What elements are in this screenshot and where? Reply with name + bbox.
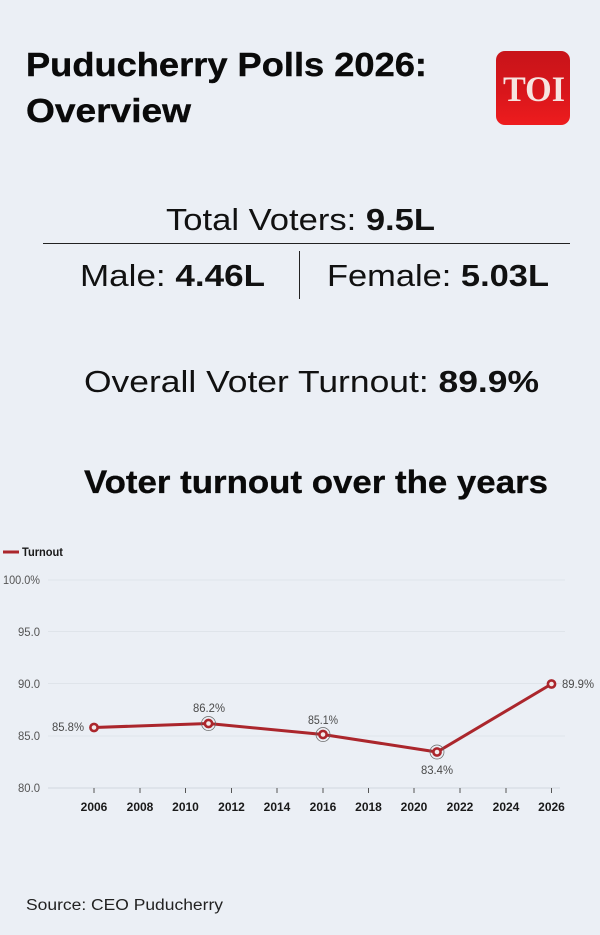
legend: Turnout — [22, 547, 63, 559]
x axis labels: 2022 — [447, 800, 474, 814]
y axis labels: 90.0 — [18, 677, 40, 691]
overall turnout: Overall Voter Turnout: 89.9% — [84, 364, 539, 399]
data labels: 89.9% — [562, 677, 594, 691]
x axis labels: 2008 — [127, 800, 154, 814]
source: Source: CEO Puducherry — [26, 897, 223, 914]
chart heading: Voter turnout over the years — [84, 464, 548, 500]
title: Overview — [26, 92, 191, 129]
x axis labels: 2024 — [493, 800, 520, 814]
y axis labels: 100.0% — [3, 573, 40, 587]
total voters: Total Voters: 9.5L — [166, 202, 435, 237]
y axis labels — [3, 573, 40, 795]
data labels: 86.2% — [193, 701, 225, 715]
x axis labels: 2018 — [355, 800, 382, 814]
icon: TOI logo: TOI — [503, 69, 565, 109]
x axis labels: 2012 — [218, 800, 245, 814]
title — [26, 46, 427, 129]
data labels: 83.4% — [421, 763, 453, 777]
data labels: 85.1% — [308, 713, 338, 727]
male voters: Male: 4.46L — [80, 258, 265, 293]
x axis labels: 2006 — [81, 800, 108, 814]
data labels — [52, 677, 594, 777]
y axis labels: 85.0 — [18, 729, 40, 743]
x axis labels: 2026 — [538, 800, 565, 814]
turnout line — [94, 684, 552, 752]
x axis labels: 2014 — [264, 800, 291, 814]
data labels: 85.8% — [52, 720, 84, 734]
title: Puducherry Polls 2026: — [26, 46, 427, 83]
female voters: Female: 5.03L — [327, 258, 549, 293]
line chart: turnout — [3, 547, 594, 814]
x axis labels: 2010 — [172, 800, 199, 814]
y axis labels: 80.0 — [18, 781, 40, 795]
x axis labels — [81, 800, 565, 814]
y axis labels: 95.0 — [18, 625, 40, 639]
x axis labels: 2020 — [401, 800, 428, 814]
icon: TOI logo — [496, 51, 570, 125]
x axis labels: 2016 — [310, 800, 337, 814]
data points — [90, 680, 555, 759]
legend — [3, 547, 63, 559]
